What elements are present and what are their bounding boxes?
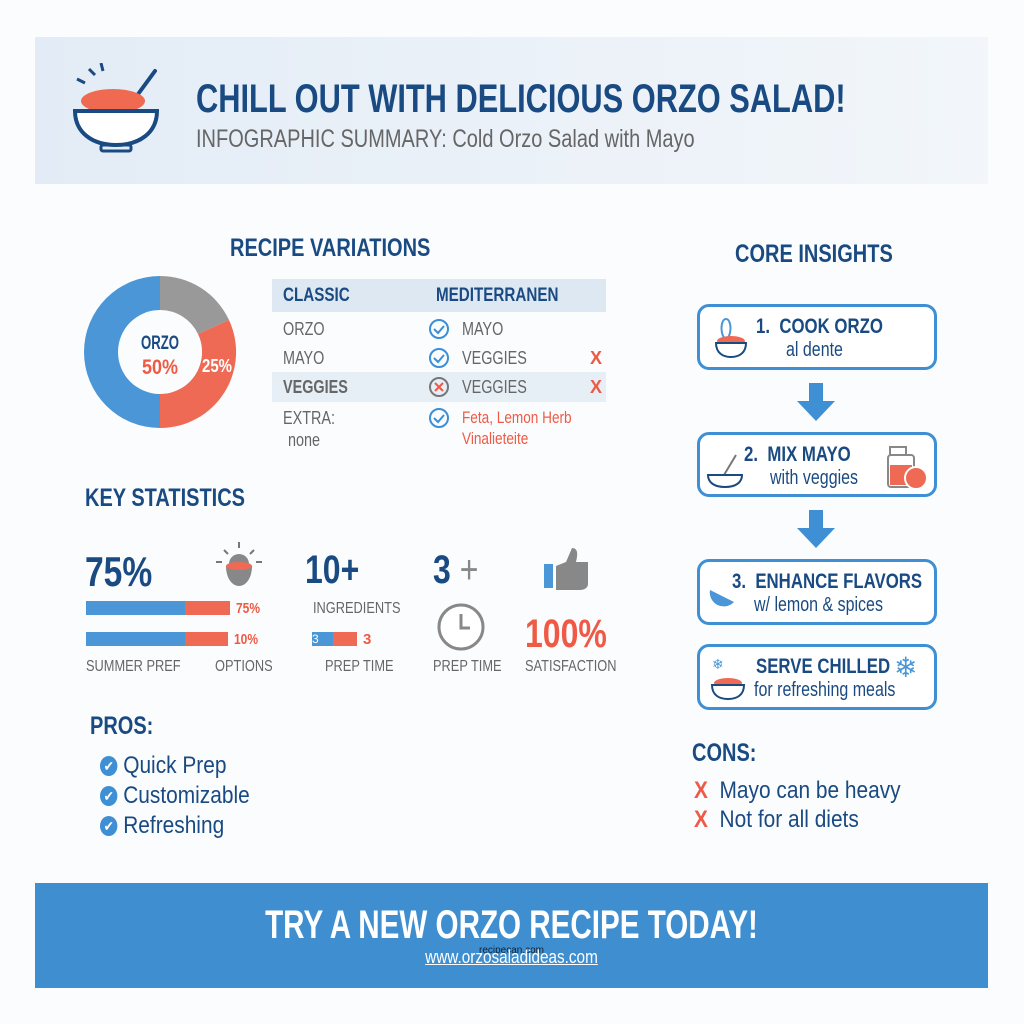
- stats: SUMMER PREF: [86, 658, 181, 675]
- table: variations: [272, 279, 606, 450]
- step 4: [697, 644, 937, 710]
- step 4: SERVE CHILLED: [756, 655, 890, 678]
- pros: Customizable: [123, 782, 250, 809]
- donut chart: 50%: [142, 356, 178, 379]
- step 3: [697, 559, 937, 625]
- table: variations: MEDITERRANEN: [436, 285, 558, 306]
- stats: PREP TIME: [325, 658, 394, 675]
- cons: [692, 739, 901, 833]
- pros: PROS:: [90, 712, 153, 740]
- pros: ✔: [104, 788, 114, 804]
- table: variations: Vinalieteite: [462, 429, 528, 448]
- heading: key statistics: KEY STATISTICS: [85, 484, 245, 512]
- table: variations: CLASSIC: [283, 285, 350, 306]
- stats: PREP TIME: [433, 658, 502, 675]
- stats: 100%: [525, 612, 607, 656]
- step 2: 2. MIX MAYO: [744, 443, 851, 466]
- footer banner: [35, 883, 988, 988]
- stats: INGREDIENTS: [313, 600, 400, 617]
- step 4: for refreshing meals: [754, 679, 895, 701]
- arrow: [797, 383, 835, 421]
- pros: ✔: [104, 758, 114, 774]
- stats: 3: [312, 632, 319, 646]
- cons: X Not for all diets: [694, 806, 859, 833]
- title: CHILL OUT WITH DELICIOUS ORZO SALAD!: [196, 77, 846, 121]
- cons: X Mayo can be heavy: [694, 777, 901, 804]
- table: variations: none: [288, 430, 320, 450]
- step 2: [697, 432, 937, 497]
- pros: Quick Prep: [123, 752, 226, 779]
- icon: thumbs up: [544, 548, 588, 590]
- icon: clock: [438, 604, 484, 650]
- table: variations: VEGGIES: [462, 348, 527, 368]
- stats: SATISFACTION: [525, 658, 617, 675]
- stats: OPTIONS: [215, 658, 273, 675]
- stats: 75%: [85, 548, 152, 595]
- stats: 10%: [234, 631, 258, 648]
- donut chart: [84, 276, 236, 428]
- step 3: 3. ENHANCE FLAVORS: [732, 570, 922, 593]
- arrow: [797, 510, 835, 548]
- icons: table checks: [429, 319, 449, 428]
- footer banner: TRY A NEW ORZO RECIPE TODAY!: [265, 903, 758, 947]
- stats: [85, 542, 617, 675]
- icon: bowl: [216, 542, 262, 586]
- table: variations: X: [590, 377, 602, 397]
- table: variations: VEGGIES: [462, 377, 527, 397]
- stats: 10+: [305, 548, 359, 592]
- step 4: ❄: [894, 652, 917, 683]
- stats: 75%: [236, 600, 260, 617]
- step 1: [697, 304, 937, 370]
- cons: CONS:: [692, 739, 756, 767]
- table: variations: MAYO: [462, 319, 503, 339]
- table: variations: ORZO: [283, 319, 325, 339]
- stats: 3 +: [433, 548, 478, 592]
- table: variations: X: [590, 348, 602, 368]
- step 1: 1. COOK ORZO: [756, 315, 883, 338]
- pros: Refreshing: [123, 812, 224, 839]
- heading: core insights: CORE INSIGHTS: [735, 240, 893, 268]
- pros: ✔: [104, 818, 114, 834]
- icon: orzo bowl: [73, 63, 159, 152]
- header band: [35, 37, 988, 184]
- footer banner: recipecan.com: [479, 945, 544, 956]
- step 2: with veggies: [770, 467, 858, 489]
- donut chart: ORZO: [141, 333, 179, 354]
- table: variations: Feta, Lemon Herb: [462, 408, 572, 427]
- table: variations: MAYO: [283, 348, 324, 368]
- step 4: ❄: [712, 656, 724, 672]
- step 1: al dente: [786, 339, 843, 361]
- stats: 3: [363, 631, 371, 648]
- donut chart: 25%: [202, 356, 232, 376]
- table: variations: EXTRA:: [283, 408, 335, 428]
- step 3: w/ lemon & spices: [754, 594, 883, 616]
- subtitle: INFOGRAPHIC SUMMARY: Cold Orzo Salad with Mayo: [196, 125, 695, 153]
- heading: recipe variations: RECIPE VARIATIONS: [230, 234, 430, 262]
- footer banner: www.orzosaladideas.com: [425, 947, 598, 967]
- pros: [90, 712, 250, 839]
- table: variations: VEGGIES: [283, 377, 348, 397]
